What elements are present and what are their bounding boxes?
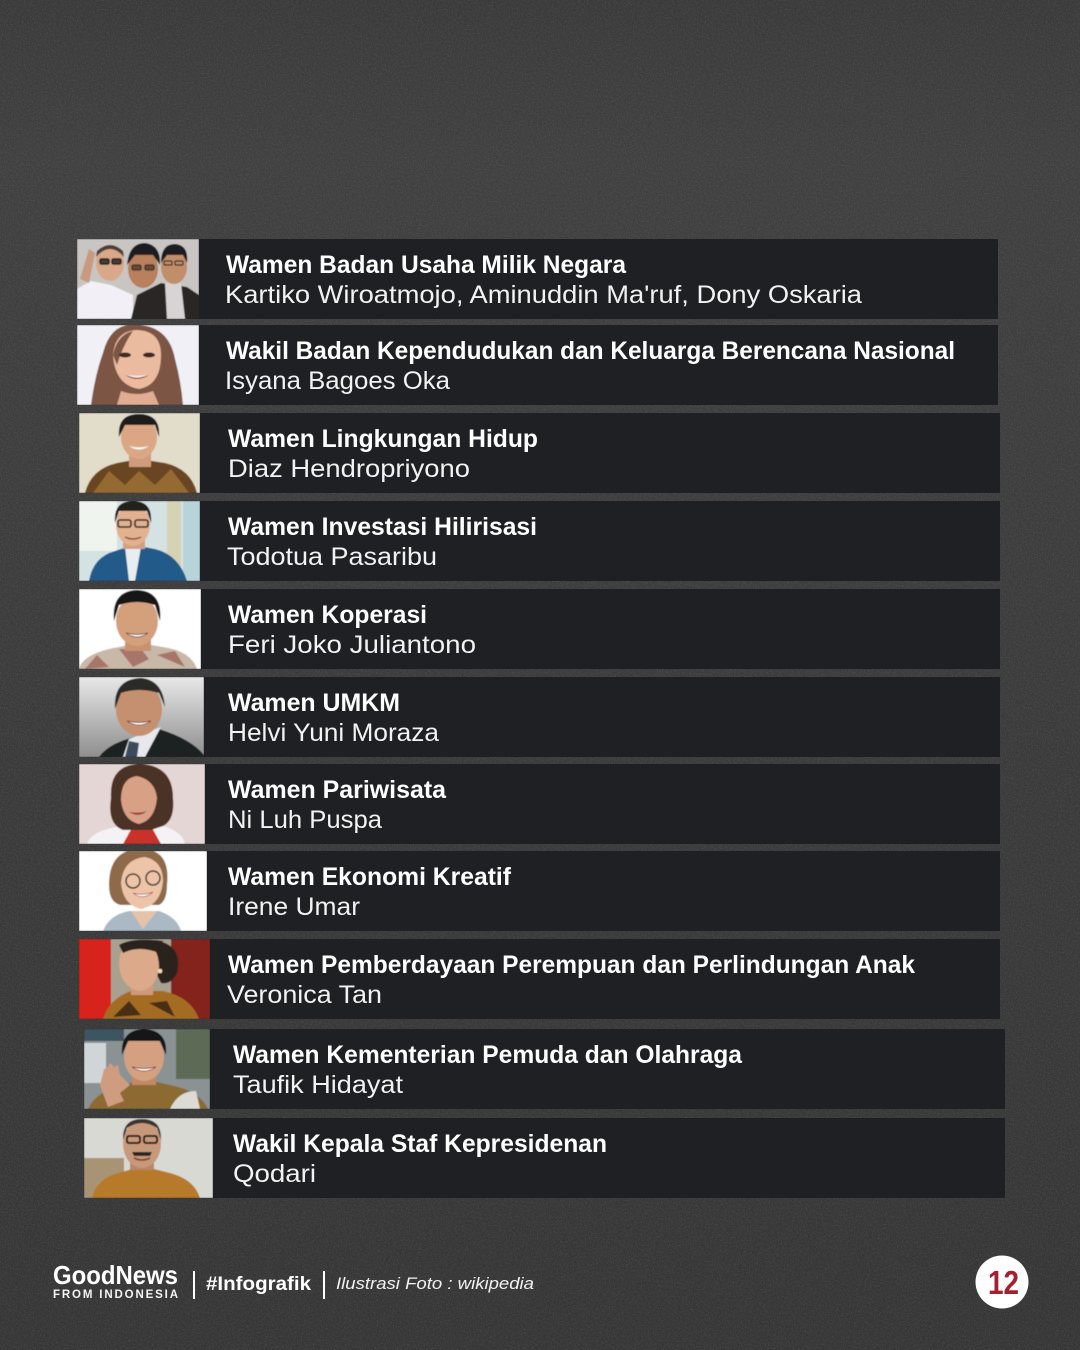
name: Ni Luh Puspa <box>228 806 382 834</box>
row 3: Lingkungan Hidup <box>79 413 1000 493</box>
photo: Helvi Yuni Moraza <box>79 677 204 757</box>
name: Irene Umar <box>228 893 360 921</box>
row 7: Pariwisata <box>79 764 1000 844</box>
row 6: UMKM <box>79 677 1000 757</box>
photo: Todotua Pasaribu <box>79 501 200 581</box>
footer brand logo <box>53 1260 178 1301</box>
title: Wamen Pemberdayaan Perempuan dan Perlindungan Anak <box>228 951 915 979</box>
row 9: Pemberdayaan Perempuan <box>79 939 1000 1019</box>
photo: Isyana Bagoes Oka <box>77 325 199 405</box>
title: Wamen Lingkungan Hidup <box>228 425 538 453</box>
photo: Feri Joko Juliantono <box>79 589 201 669</box>
photo: Ni Luh Puspa <box>79 764 205 844</box>
photo: three men <box>77 239 199 319</box>
name: Qodari <box>233 1160 316 1188</box>
page number badge <box>976 1256 1028 1308</box>
title: Wakil Kepala Staf Kepresidenan <box>233 1130 607 1158</box>
footer brand logo: FROM INDONESIA <box>53 1289 178 1301</box>
footer brand logo: GoodNews <box>53 1260 178 1290</box>
title: Wamen Ekonomi Kreatif <box>228 863 512 891</box>
footer divider 2 <box>323 1271 325 1299</box>
title: Wamen Investasi Hilirisasi <box>228 513 537 541</box>
row 11: Kepala Staf Kepresidenan <box>84 1118 1005 1198</box>
row 5: Koperasi <box>79 589 1000 669</box>
row 8: Ekonomi Kreatif <box>79 849 1000 931</box>
title: Wamen Koperasi <box>228 601 427 629</box>
photo: Taufik Hidayat <box>84 1029 210 1109</box>
photo: Veronica Tan <box>79 939 210 1019</box>
photo: Qodari <box>84 1118 213 1198</box>
name: Isyana Bagoes Oka <box>225 367 450 395</box>
photo: Diaz Hendropriyono <box>79 413 200 493</box>
footer photo credit: Ilustrasi Foto : wikipedia <box>336 1274 534 1293</box>
name: Taufik Hidayat <box>233 1071 403 1099</box>
name: Feri Joko Juliantono <box>228 631 476 659</box>
name: Todotua Pasaribu <box>227 543 437 571</box>
footer divider 1 <box>193 1271 195 1299</box>
title: Wamen Pariwisata <box>228 776 447 804</box>
row 4: Investasi Hilirisasi <box>79 501 1000 581</box>
name: Helvi Yuni Moraza <box>228 719 439 747</box>
photo: Irene Umar <box>79 851 207 931</box>
title: Wamen UMKM <box>228 689 400 717</box>
title: Wamen Kementerian Pemuda dan Olahraga <box>233 1041 743 1069</box>
name: Kartiko Wiroatmojo, Aminuddin Ma'ruf, Dony Oskaria <box>225 281 862 309</box>
row 2: Wakil BKKBN <box>77 325 998 405</box>
title: Wamen Badan Usaha Milik Negara <box>226 251 627 279</box>
name: Diaz Hendropriyono <box>228 455 470 483</box>
title: Wakil Badan Kependudukan dan Keluarga Berencana Nasional <box>226 337 955 365</box>
name: Veronica Tan <box>227 981 382 1009</box>
row 10: Pemuda dan Olahraga <box>84 1029 1005 1109</box>
page number badge: 12 <box>988 1264 1019 1301</box>
row 1: Wamen BUMN <box>77 239 998 319</box>
footer hashtag: #Infografik <box>206 1274 311 1295</box>
